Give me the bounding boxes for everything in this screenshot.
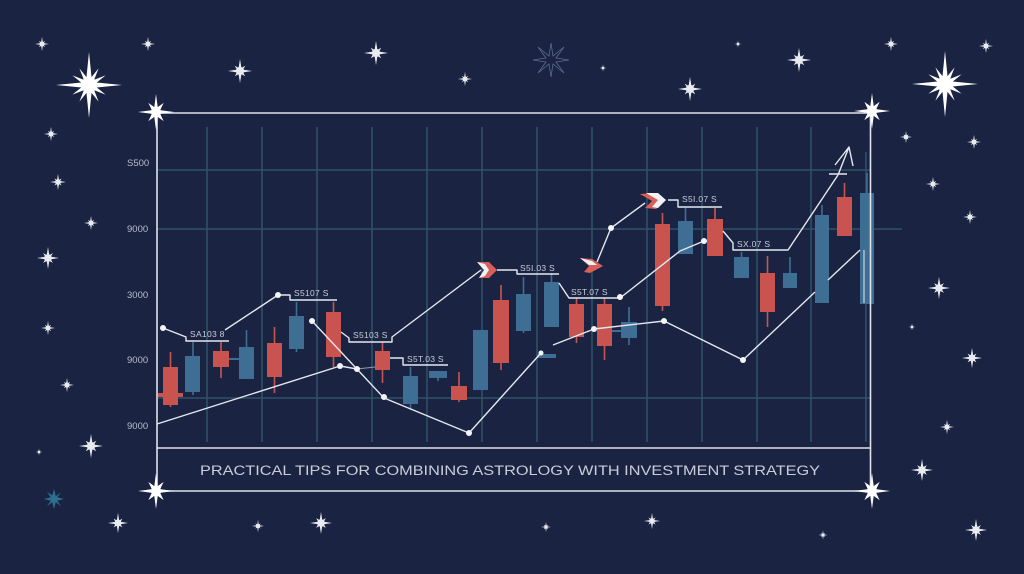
corner stars <box>138 93 890 509</box>
y-axis labels: S500 <box>127 158 149 169</box>
price labels: S5T.03 S <box>407 354 444 364</box>
price labels: S5103 S <box>353 330 388 340</box>
price labels: S5107 S <box>294 288 329 298</box>
lower trend lines <box>157 250 864 433</box>
data point markers <box>160 225 746 436</box>
arrow: upward trend tip <box>829 147 853 175</box>
icon: blue star <box>44 489 64 509</box>
title: PRACTICAL TIPS FOR COMBINING ASTROLOGY WITH INVESTMENT STRATEGY <box>200 463 820 478</box>
price labels: S5T.07 S <box>571 287 608 297</box>
y-axis labels: 9000 <box>127 421 148 432</box>
y-axis labels: 3000 <box>127 290 148 301</box>
price labels: S5I.07 S <box>682 194 717 204</box>
chart frame <box>157 111 871 491</box>
chevron arrows <box>477 193 666 278</box>
y-axis labels: 9000 <box>127 224 148 235</box>
price labels: S5I.03 S <box>520 263 555 273</box>
icon: outlined star <box>533 43 569 77</box>
price labels: SX.07 S <box>737 239 770 249</box>
upper trend line with price brackets <box>163 175 838 365</box>
price labels: SA103 8 <box>190 329 225 339</box>
price labels <box>190 194 770 364</box>
y-axis labels: 9000 <box>127 355 148 366</box>
y-axis labels <box>127 158 149 432</box>
candlestick chart <box>158 173 874 410</box>
grid lines <box>157 127 902 442</box>
